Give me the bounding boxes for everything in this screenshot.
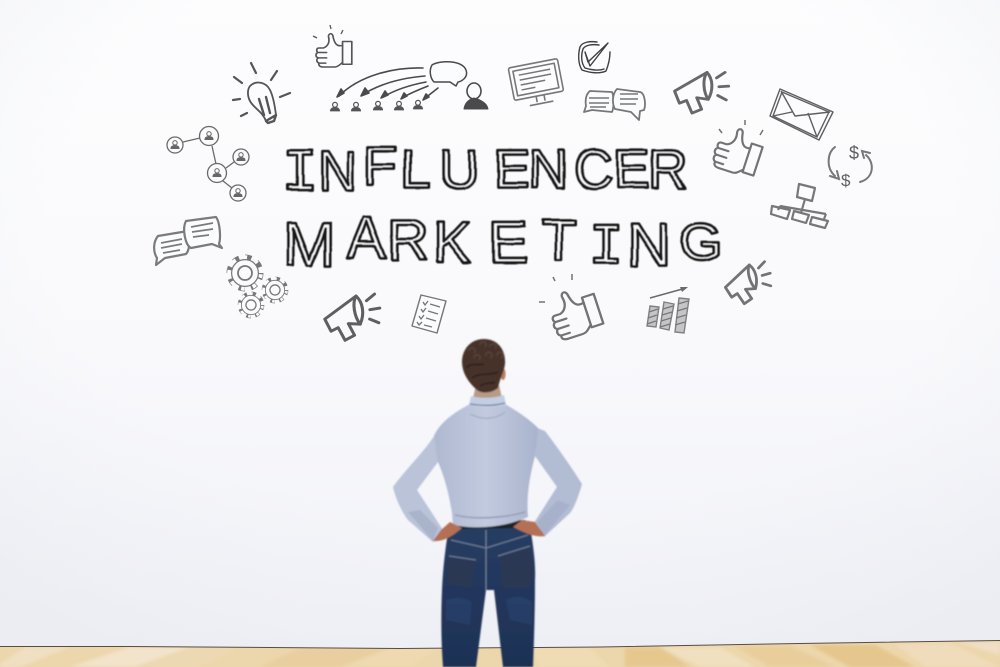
title: INFLUENCER MARKETING: C (573, 138, 613, 200)
title: INFLUENCER MARKETING: L (401, 138, 432, 200)
dollar signs: $ (849, 143, 859, 163)
neck (473, 385, 502, 398)
icon: people network (167, 126, 249, 201)
title: INFLUENCER MARKETING: N (318, 140, 358, 202)
broadcast arrows (337, 68, 438, 100)
title: INFLUENCER MARKETING: N (528, 138, 568, 200)
icon: thumbs up, right (710, 120, 766, 179)
speaker person (467, 83, 481, 99)
icon: bar chart with arrow (647, 287, 689, 333)
icon: monitor (508, 59, 565, 108)
icon: double speech bubbles, left (154, 217, 222, 265)
right arm (534, 428, 582, 537)
title: INFLUENCER MARKETING: N (627, 211, 672, 280)
title: INFLUENCER MARKETING: U (439, 138, 479, 200)
icon: megaphone, top right (675, 72, 729, 113)
title: INFLUENCER MARKETING: R (387, 208, 429, 273)
icon: double speech bubbles, top right (584, 89, 645, 120)
man seen from behind (393, 339, 582, 667)
hair (462, 339, 505, 392)
icon: megaphone, bottom left (323, 294, 383, 342)
collar (469, 395, 506, 407)
belt (453, 520, 526, 529)
title: INFLUENCER MARKETING: R (648, 138, 688, 200)
title: INFLUENCER MARKETING: F (364, 135, 398, 197)
icon: gears (229, 257, 286, 316)
icon: org chart (771, 184, 828, 228)
icon: envelope (770, 89, 833, 140)
icon: check mark box (579, 42, 610, 73)
icon: dollar exchange cycle: $ (841, 171, 851, 190)
title: INFLUENCER MARKETING: K (433, 210, 472, 275)
icon: light bulb (233, 63, 290, 123)
speech bubble (430, 62, 467, 86)
title: INFLUENCER MARKETING: E (613, 138, 650, 200)
title: INFLUENCER MARKETING (282, 135, 722, 281)
icon: megaphone, right (722, 261, 775, 307)
title: INFLUENCER MARKETING: I (282, 141, 318, 209)
cuffs shading (408, 500, 570, 541)
title: INFLUENCER MARKETING: M (283, 211, 335, 280)
audience (330, 102, 340, 111)
hands (433, 522, 462, 541)
icon: checklist (412, 295, 446, 333)
ear (500, 368, 506, 380)
jeans (441, 525, 535, 667)
left arm (393, 436, 443, 542)
title: INFLUENCER MARKETING: I (589, 216, 624, 281)
shirt body (434, 404, 538, 527)
icon: dollar exchange cycle (829, 143, 872, 190)
title: INFLUENCER MARKETING: G (680, 212, 722, 272)
title: INFLUENCER MARKETING: A (347, 206, 386, 271)
title: INFLUENCER MARKETING: E (489, 210, 528, 275)
icon: speaker broadcasting to audience (330, 62, 488, 111)
title: INFLUENCER MARKETING: E (493, 138, 530, 200)
wooden floor (0, 638, 1000, 667)
title: INFLUENCER MARKETING: T (541, 208, 576, 273)
icon: thumbs up, top (313, 25, 352, 67)
icon: thumbs up, bottom centre (539, 274, 604, 342)
